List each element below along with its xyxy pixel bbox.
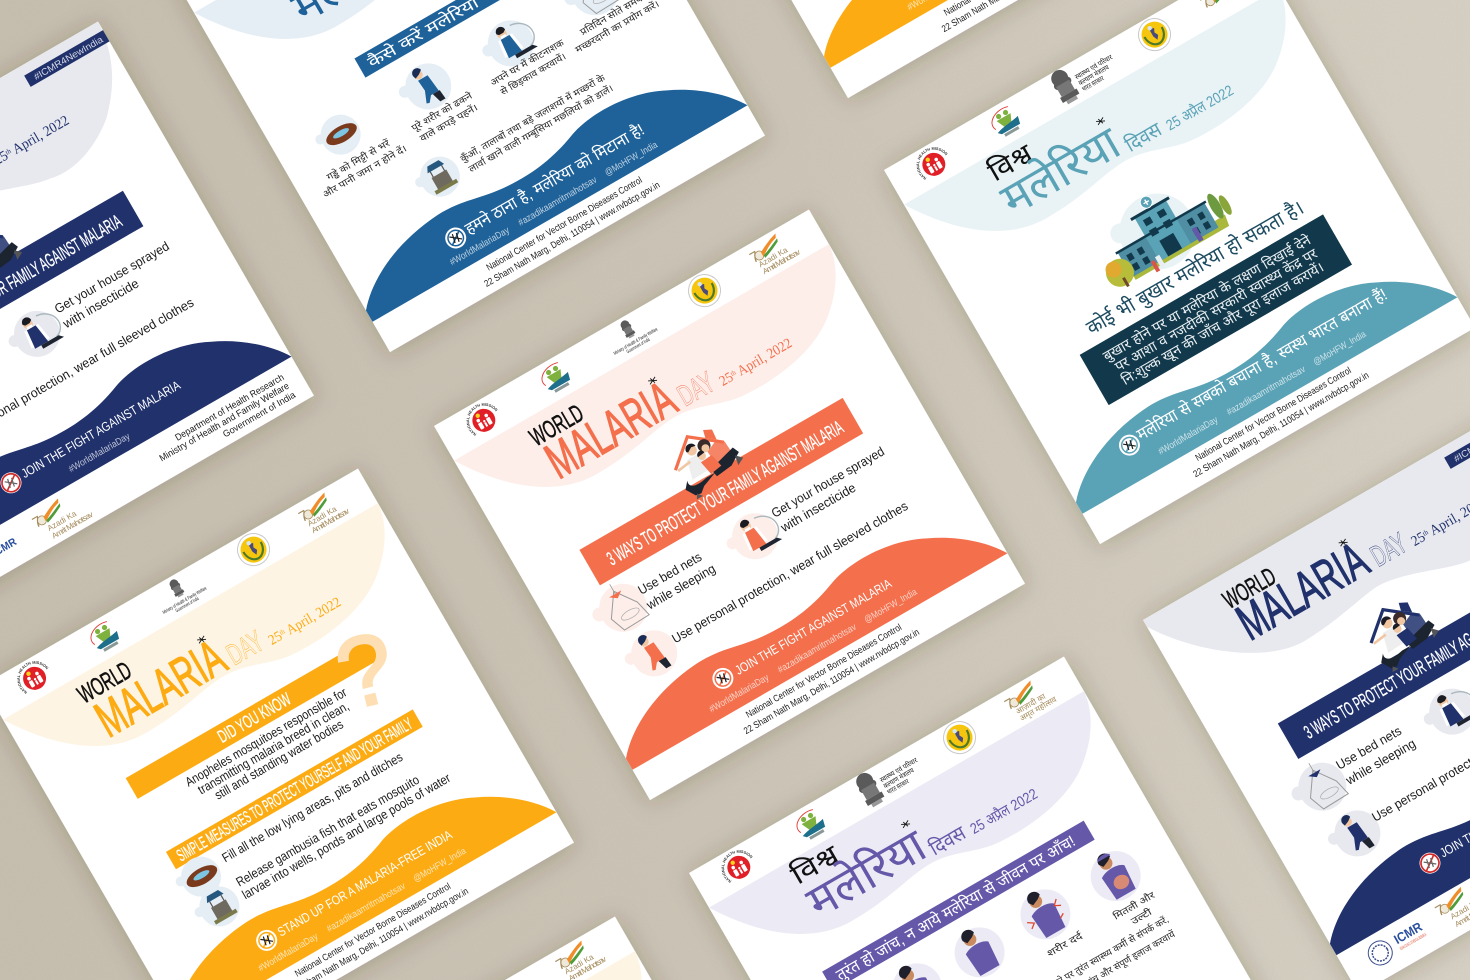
bottom blob <box>1048 238 1457 514</box>
logos <box>722 680 1059 883</box>
tip: fill pits: गड्ढे को मिट्टी से भरें <box>325 137 393 183</box>
footer: 22 Sham Nath Marg, Delhi, 110054 | www.nvbdcp.gov.in <box>1191 370 1371 480</box>
logo: Azadi: Amrit Mahotsav <box>50 510 95 541</box>
icon: mosquito <box>441 224 470 252</box>
hashtags <box>708 586 920 715</box>
label: nausea <box>1111 889 1165 934</box>
icon: family <box>663 418 750 502</box>
footer: National Center for Vector Borne Diseases Control <box>744 622 904 721</box>
icon: spray <box>719 504 788 571</box>
icon: spray <box>474 11 544 78</box>
icon: bed net <box>583 572 656 644</box>
fact text: Anopheles mosquitoes responsible for <box>182 684 350 790</box>
hashtag tag: #ICMR4NewIndia <box>32 34 106 83</box>
panel: teal Hindi card <box>880 0 1470 551</box>
tip: insecticide: अपने घर में कीटनाशक <box>488 36 567 89</box>
hashtags: #WorldMalariaDay <box>257 931 320 974</box>
title: DAY <box>221 625 270 672</box>
call to action: JOIN THE FIGHT AGAINST MALARIA <box>732 576 894 678</box>
dark info box <box>1080 214 1352 405</box>
title <box>525 291 798 491</box>
icon: well <box>408 149 467 206</box>
logos: Azadi Ka <box>306 504 339 528</box>
logos: NATIONAL HEALTH MISSION <box>916 147 948 180</box>
icon: pit <box>309 107 368 164</box>
icon: person <box>1321 802 1389 868</box>
date: April, 2022 <box>7 113 72 159</box>
icon: family <box>1359 591 1445 675</box>
icon: mosquito <box>709 664 737 693</box>
top blob <box>260 951 680 980</box>
logo: seal <box>1364 937 1397 969</box>
logos: Amrit Mahotsav <box>310 506 351 535</box>
label: body ache: शरीर दर्द <box>1045 929 1086 960</box>
fact text: transmitting malaria breed in clean, <box>195 698 351 797</box>
top blob <box>454 244 874 538</box>
footer: National Center for Vector Borne Diseases Control <box>485 175 644 274</box>
title: विश्व <box>785 838 844 890</box>
icon: bed net <box>1282 751 1355 823</box>
title <box>785 737 1042 929</box>
tip: insecticide: से छिड़काव करवायें। <box>498 51 568 98</box>
tip: full clothes <box>409 89 482 145</box>
logos: भारत सरकार <box>886 778 910 796</box>
title: WORLD <box>1218 562 1281 615</box>
logos: Government of India <box>626 337 651 355</box>
logos: NATIONAL HEALTH MISSION <box>466 403 498 436</box>
logos: भारत सरकार <box>1081 75 1105 93</box>
tip: personal protection: Use personal protection, wear full sleeved clothes <box>669 498 911 646</box>
department text: Government of India <box>221 389 298 440</box>
department text: Ministry of Health and Family Welfare <box>158 381 291 464</box>
tip: fill pits <box>314 131 409 200</box>
icon: net <box>555 0 628 28</box>
illustration: hospital <box>1080 161 1242 298</box>
tip: insecticide <box>488 36 573 100</box>
hashtag: #WorldMalariaDay <box>67 431 132 475</box>
logo: Azadi <box>29 487 95 546</box>
call to action: JOIN THE FIGHT AGAINST MALARIA <box>19 377 183 481</box>
hashtags: @MoHFW_India <box>412 845 469 885</box>
tip: fill pits: और पानी जमा न होने दें। <box>321 143 409 200</box>
tip: insecticide: Get your house sprayed <box>769 444 887 521</box>
title: WORLD <box>525 399 588 452</box>
call to action: हमने ठाना है, मलेरिया को मिटाना है! <box>461 120 648 238</box>
icon: question mark: ? <box>325 610 406 732</box>
hashtags: #azadikaamritmahotsav <box>516 174 599 229</box>
bottom blob <box>0 298 291 573</box>
title: DAY <box>672 366 721 413</box>
logos: कल्याण मंत्रालय <box>883 767 916 790</box>
title: th <box>278 627 287 637</box>
title: DAY <box>1365 527 1413 573</box>
label: nausea: मितली और <box>1111 889 1158 923</box>
icon: person <box>618 622 686 688</box>
banner <box>579 398 863 585</box>
logos: Ministry of Health & Family Welfare <box>613 327 659 357</box>
banner: simple measures <box>166 709 423 869</box>
bottom blob <box>853 941 1262 980</box>
hashtags: @MoHFW_India <box>863 586 920 626</box>
banner: did you know <box>126 636 384 799</box>
title: MALARIA <box>536 370 685 489</box>
call to action: STAND UP FOR A MALARIA-FREE INDIA <box>275 827 455 939</box>
icon: symptom fever <box>883 953 951 980</box>
logos: 7 <box>1002 695 1018 714</box>
hashtag tag <box>24 30 109 87</box>
icon: symptom nausea <box>1081 841 1150 910</box>
bottom blob <box>598 494 1007 770</box>
logo: Azadi: 7 <box>553 955 569 974</box>
title: 25 <box>717 369 737 390</box>
top blob <box>3 503 423 797</box>
tip: bed nets: while sleeping <box>643 561 718 613</box>
title: दिवस <box>925 820 970 860</box>
logos <box>916 0 1220 180</box>
department text: Department of Health Research <box>173 372 286 444</box>
footer: 22 Sham Nath Marg, Delhi, 110054 | www.nvbdcp.gov.in <box>482 180 662 290</box>
title <box>981 35 1238 226</box>
logo: Azadi <box>1432 876 1470 934</box>
banner: तुरंत हो जांच, न आये मलेरिया से जीवन पर आँच! <box>833 831 1079 980</box>
date: th <box>4 147 13 157</box>
title: WORLD <box>73 656 136 709</box>
logo: Azadi: Azadi Ka <box>563 952 596 976</box>
tip: gambusia: Release gambusia fish that eats mosquito <box>233 772 422 889</box>
fact text: still and standing water bodies <box>212 716 346 803</box>
hashtags: @MoHFW_India <box>1312 329 1369 368</box>
hashtags: #azadikaamritmahotsav <box>1225 364 1308 418</box>
logos: स्वास्थ्य एवं परिवार <box>879 756 919 784</box>
logo: Azadi: 7 <box>30 513 45 532</box>
hashtags: @MoHFW_India <box>603 139 660 179</box>
footer: National Center for Vector Borne Diseases Control <box>293 881 453 980</box>
bottom blob <box>147 753 556 980</box>
panel: blue Hindi card <box>174 0 765 352</box>
title: विश्व <box>982 137 1038 187</box>
bottom blob <box>1302 680 1470 955</box>
banner <box>1278 571 1470 759</box>
logo: Azadi: Azadi Ka <box>46 509 78 533</box>
hashtags <box>257 845 469 974</box>
tip: gambusia: larvae into wells, ponds and large pools of water <box>239 770 454 902</box>
logos: Government of India <box>175 596 200 614</box>
icon: pit <box>169 849 228 906</box>
icon: mosquito ban <box>1416 849 1444 877</box>
logo: Azadi <box>552 934 608 980</box>
title: April, 2022 <box>281 594 344 640</box>
dark info box: पर आशा व नजदीकी सरकारी स्वास्थ्य केंद्र पर <box>1112 245 1320 374</box>
logos: Ministry of Health & Family Welfare <box>162 586 208 616</box>
hashtags <box>448 139 660 268</box>
tip: bed nets <box>634 546 718 613</box>
hashtags: #WorldMalariaDay <box>708 672 771 715</box>
icon: symptom headache <box>945 917 1014 980</box>
logos: कल्याण मंत्रालय <box>1078 64 1111 87</box>
hashtags: #WorldMalariaDay <box>448 225 512 268</box>
tip: gambusia: कुँओं, तालाबों तथा बड़े जलाशयों में मच्छरों के <box>458 72 608 165</box>
tip: fill pits: Fill all the low lying areas, pits and ditches <box>219 749 406 865</box>
top blob <box>904 0 1324 282</box>
hashtags: #WorldMalariaDay <box>1157 414 1220 458</box>
icon: mosquito <box>252 926 281 955</box>
top blob <box>709 691 1129 980</box>
title: मलेरिया <box>797 818 935 928</box>
icon: family <box>0 212 29 297</box>
hashtags <box>1157 329 1369 458</box>
title: 25 <box>1409 529 1429 550</box>
icon: person <box>392 55 460 121</box>
tip: bed nets: while sleeping <box>1342 736 1418 788</box>
title: 25 <box>266 628 286 649</box>
logos: स्वास्थ्य एवं परिवार <box>1074 53 1114 81</box>
bottom blob <box>338 46 747 322</box>
panel: navy card right <box>1143 404 1470 980</box>
tip: bed nets: Use bed nets <box>635 549 705 598</box>
banner: 3 WAYS TO PROTECT YOUR FAMILY AGAINST MALARIA <box>603 417 847 570</box>
hashtags: #azadikaamritmahotsav <box>776 622 859 676</box>
icon: spray <box>0 301 70 368</box>
title: th <box>729 368 738 378</box>
logos: 7 <box>747 248 763 267</box>
tip: insecticide: Get your house sprayed <box>52 238 172 316</box>
banner <box>0 191 143 379</box>
icon: mosquito ban <box>0 468 25 497</box>
title: MALARIA <box>86 629 235 748</box>
tip: insecticide: with insecticide <box>777 480 858 535</box>
tip: bed nets <box>1333 720 1418 788</box>
title: April, 2022 <box>732 335 795 381</box>
call to action: मलेरिया से सबको बचाना है, स्वस्थ भारत बनाना हैं! <box>1132 283 1391 444</box>
logos <box>466 234 802 436</box>
dark info box: बुखार होने पर या मलेरिया के लक्षण दिखाई देने <box>1100 231 1314 366</box>
logos: अमृत महोत्सव <box>1018 695 1059 723</box>
tip: full clothes: पूरे शरीर को ढकने <box>409 89 475 134</box>
logos: NATIONAL HEALTH MISSION <box>17 661 48 694</box>
top blob <box>1143 404 1470 719</box>
banner: simple measures: SIMPLE MEASURES TO PROTECT YOURSELF AND YOUR FAMILY <box>173 714 416 865</box>
heading text: कोई भी बुखार मलेरिया हो सकता है। <box>1082 195 1308 341</box>
panel: navy card left <box>0 22 314 612</box>
tip: full clothes: वाले कपड़े पहनें। <box>418 102 480 144</box>
logo: Azadi: 7 <box>1433 901 1448 920</box>
logos: Amrit Mahotsav <box>761 247 802 276</box>
icon: well <box>188 879 247 936</box>
footer: 22 Sham Nath Marg, Delhi, 110054 | www.nvbdcp.gov.in <box>742 627 922 737</box>
hashtags: #azadikaamritmahotsav <box>325 881 408 935</box>
panel: orange card top <box>632 0 1223 98</box>
label: nausea: उल्टी <box>1129 906 1155 927</box>
tip: insecticide: with insecticide <box>59 276 141 332</box>
title: 25 अप्रैल 2022 <box>1163 82 1237 134</box>
top blob <box>194 0 614 90</box>
title: दिवस <box>1121 117 1166 157</box>
banner: did you know: DID YOU KNOW <box>214 689 294 747</box>
tip: bed nets: Use bed nets <box>1333 723 1404 773</box>
panel: card bottom center <box>240 916 831 980</box>
footer: National Center for Vector Borne Diseases Control <box>1194 365 1353 464</box>
logo: ICMR: ICMR <box>1391 919 1425 947</box>
logos: NATIONAL HEALTH MISSION <box>722 850 753 883</box>
panel: purple Hindi card <box>685 653 1264 980</box>
logos: आज़ादी का <box>1014 691 1048 716</box>
panel: coral card center <box>394 206 1032 840</box>
icon: symptom body ache <box>1011 879 1080 948</box>
icon: mosquito <box>1115 431 1144 459</box>
tip: gambusia: लार्वा खाने वाली गम्बूसिया मछलियों को डालें। <box>467 82 615 175</box>
title: MALARIA <box>1227 531 1378 651</box>
logos <box>17 492 351 694</box>
title: th <box>1421 528 1430 538</box>
title: मलेरिया <box>991 115 1129 226</box>
logos: 7 <box>296 507 312 526</box>
banner <box>354 0 560 78</box>
icon: spray <box>1416 679 1470 746</box>
logos: Azadi Ka <box>757 245 790 269</box>
title <box>73 548 347 750</box>
bottom blob <box>796 0 1205 68</box>
top blob <box>0 22 155 337</box>
dark info box: नि:शुल्क खून की जाँच और पूरा इलाज करायें। <box>1118 258 1328 390</box>
title: 25 अप्रैल 2022 <box>967 786 1041 838</box>
tip: bed net: मच्छरदानी का प्रयोग करें। <box>573 0 661 56</box>
panel: orange card left <box>0 466 580 980</box>
hashtag tag <box>1444 412 1470 469</box>
